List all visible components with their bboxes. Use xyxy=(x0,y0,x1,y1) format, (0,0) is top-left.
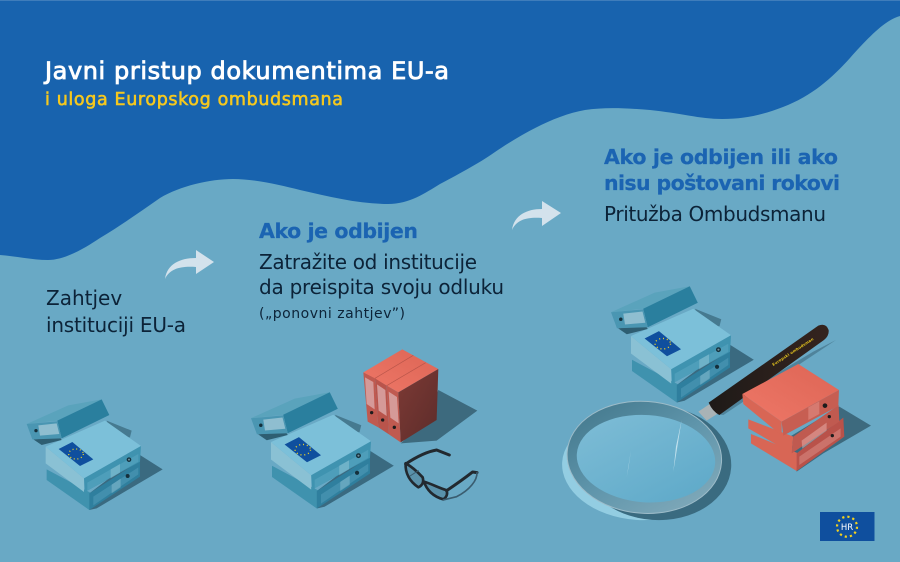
arrow 2 xyxy=(512,201,561,230)
step 3 text: Pritužba Ombudsmanu xyxy=(604,202,826,226)
binder stack: step 1 xyxy=(27,399,163,510)
step 2 text: („ponovni zahtjev”) xyxy=(259,306,405,322)
handle xyxy=(698,325,836,421)
glasses xyxy=(406,450,477,500)
binder stack: step 2 xyxy=(251,392,394,508)
step 3 heading: Ako je odbijen ili ako xyxy=(604,145,838,169)
title: Javni pristup dokumentima EU-a xyxy=(43,57,449,85)
red binders: step 2 xyxy=(363,349,477,443)
step 2 text: Zatražite od institucije xyxy=(259,250,477,274)
handle lettering: Europski ombudsman xyxy=(772,337,815,367)
step 2 text: da preispita svoju odluku xyxy=(259,275,504,299)
dark blue wave header xyxy=(0,0,900,260)
step 2 text xyxy=(259,250,504,322)
magnifying glass xyxy=(559,325,836,525)
EU flag with HR label xyxy=(820,512,874,541)
step 1 text: instituciji EU-a xyxy=(46,313,186,337)
arrow 1 xyxy=(165,250,214,279)
step 1 text: Zahtjev xyxy=(46,286,122,310)
red binder stack: step 3 xyxy=(742,364,871,472)
step 1 text xyxy=(46,286,186,337)
top edge highlight xyxy=(0,0,900,1)
EU flag with HR label: HR xyxy=(841,523,853,533)
step 2 heading: Ako je odbijen xyxy=(259,219,418,243)
binder stack: step 3 xyxy=(611,286,754,402)
subtitle: i uloga Europskog ombudsmana xyxy=(45,90,343,110)
step 3 heading: nisu poštovani rokovi xyxy=(604,171,840,195)
step 3 heading xyxy=(604,145,840,195)
